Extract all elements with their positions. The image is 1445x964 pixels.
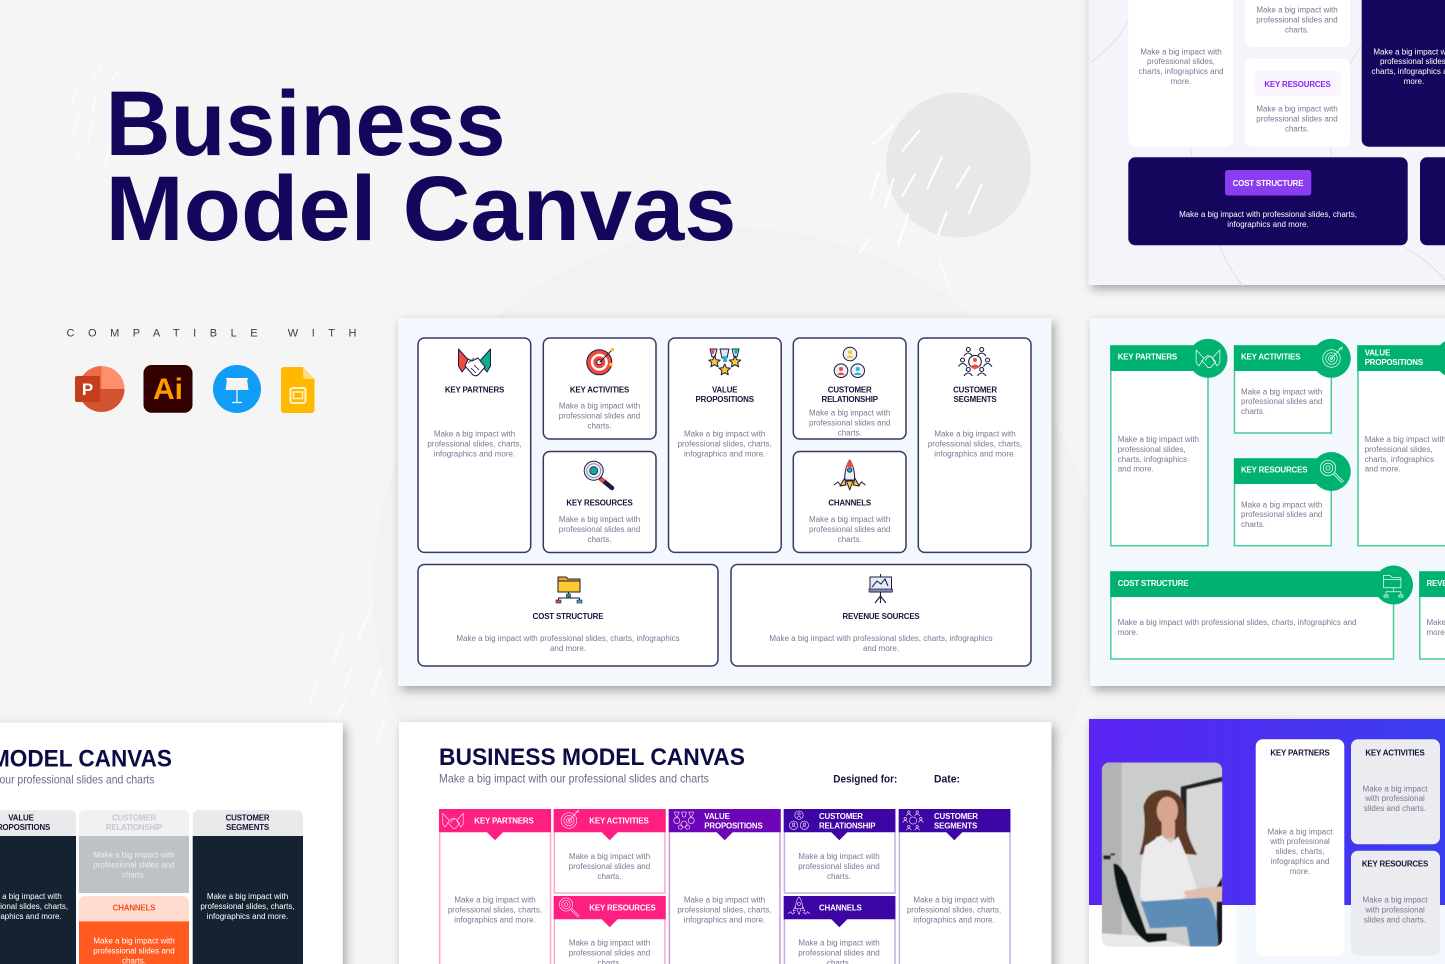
description: Make a big impact with — [93, 851, 175, 860]
description: professional slides and — [798, 949, 880, 958]
description: professional slides and — [569, 949, 650, 958]
subheading: our professional slides and charts — [0, 772, 154, 786]
description: charts. — [597, 872, 622, 881]
description: more. — [1404, 77, 1424, 86]
description: infographics and more. — [454, 916, 536, 924]
card: key partners — [1110, 339, 1228, 546]
label: KEY RESOURCES — [1362, 860, 1428, 869]
heading: BUSINESS MODEL CANVAS — [439, 744, 745, 771]
description: Make a big impact with — [798, 939, 880, 948]
panel: photo canvas (bottom right) — [1089, 719, 1445, 964]
description: charts. — [1241, 520, 1265, 529]
software icons — [75, 365, 314, 413]
description: Make a big impact with — [93, 937, 175, 946]
icon: target — [561, 810, 579, 828]
description: professional slides, charts, — [928, 440, 1022, 449]
card: revenue sources — [1419, 571, 1445, 659]
card: customer segments — [193, 810, 303, 964]
card: key partners body — [1128, 0, 1233, 147]
panel: outlined icon canvas — [398, 318, 1052, 686]
description: Make a big impact with — [1118, 435, 1199, 444]
icon: rocket — [788, 897, 810, 915]
description: professional slides and — [809, 419, 890, 428]
description: professional slides, — [1118, 445, 1186, 454]
icon: Google Slides — [281, 367, 314, 413]
description: Make a big impact with professional slides, charts, — [1179, 210, 1357, 219]
icon: target — [587, 348, 614, 375]
icon: PowerPoint: P — [82, 380, 93, 399]
label: PROPOSITIONS — [704, 822, 763, 831]
description: professional slides and — [559, 525, 640, 534]
description: Make a big impact with — [798, 852, 880, 861]
label: KEY PARTNERS — [445, 385, 504, 394]
description: Make a big impact with — [1241, 500, 1322, 509]
description: professional slides and — [569, 862, 650, 871]
description: infographics and more. — [934, 450, 1016, 458]
description: Make a big impact — [1363, 896, 1428, 905]
card: customer segments — [918, 338, 1031, 552]
title: Business — [106, 73, 506, 175]
card: channels — [793, 452, 906, 552]
description: professional slides, charts, — [678, 440, 772, 449]
card: key resources — [543, 452, 656, 552]
description: charts. — [838, 428, 862, 438]
card: customer relationship — [793, 338, 906, 439]
card: key partners — [1256, 739, 1344, 956]
description: Make a big impact with professional slides, charts, infographics and — [1118, 618, 1356, 627]
label: RELATIONSHIP — [106, 823, 162, 832]
icon: Keynote — [213, 365, 261, 413]
description: Make a big impact with — [934, 430, 1016, 439]
description: professional slides and — [559, 412, 640, 421]
compatible with label: COMPATIBLE WITH — [66, 328, 357, 340]
card: key activities — [1351, 739, 1440, 844]
description: Make a big impact with professional slides, charts, infographics — [456, 634, 680, 643]
label: RELATIONSHIP — [822, 395, 878, 404]
icon: magnifier — [584, 461, 612, 488]
card: revenue sources edge — [1420, 157, 1445, 245]
photo of seated woman — [1102, 762, 1223, 947]
description: Make a big impact with — [569, 852, 650, 861]
label: PROPOSITIONS — [696, 395, 754, 404]
card: cost structure — [418, 564, 718, 666]
description: professional slides and — [1241, 510, 1322, 519]
description: slides, charts, — [1276, 847, 1324, 856]
label: KEY ACTIVITIES — [1365, 749, 1425, 758]
description: professional slides and — [809, 525, 890, 534]
card: key resources — [1351, 851, 1440, 956]
card: key partners — [439, 809, 551, 964]
description: Make a big impact with — [809, 515, 890, 524]
description: Make a big impact with professional slides, charts, infographics — [769, 634, 993, 643]
card: value propositions — [668, 338, 781, 552]
description: Make a big impact with — [684, 430, 765, 439]
card: customer relationship — [784, 809, 895, 893]
description: Make a big impact with — [569, 939, 650, 948]
description: professional slides and — [1256, 16, 1338, 25]
panel: navy and orange canvas (bottom left) — [0, 723, 343, 964]
description: professional slides and — [1256, 115, 1338, 124]
description: infographics and more. — [207, 912, 288, 921]
card: key activities body — [1245, 0, 1350, 47]
label pill: COST STRUCTURE — [1233, 179, 1303, 188]
description: professional slides and — [93, 861, 175, 870]
icon: Illustrator: Ai — [153, 373, 183, 406]
label: KEY RESOURCES — [1241, 466, 1307, 474]
card: channels — [784, 896, 895, 964]
label: VALUE — [704, 812, 730, 821]
card: key resources — [554, 896, 666, 964]
description: infographics and more. — [1227, 220, 1309, 229]
card: value propositions — [669, 809, 781, 964]
description: Make a big impact with — [434, 430, 515, 439]
card: value propositions — [0, 810, 76, 964]
card: customer relationship — [79, 810, 189, 893]
label: KEY ACTIVITIES — [589, 816, 649, 825]
card: cost structure — [1110, 566, 1413, 659]
label: SEGMENTS — [226, 823, 269, 832]
card: key resources — [1245, 59, 1350, 147]
label: RELATIONSHIP — [819, 822, 875, 831]
description: professional slides, — [1147, 57, 1215, 66]
icon: chart easel — [869, 574, 892, 603]
description: more. — [1171, 77, 1191, 86]
label: REVENUE SOURCES — [842, 612, 920, 621]
icon: people — [789, 811, 809, 830]
description: charts, infographics — [1118, 455, 1187, 464]
label: CHANNELS — [819, 903, 862, 912]
label: KEY PARTNERS — [1270, 749, 1330, 758]
icon: connected people — [834, 347, 864, 378]
description: infographics and more. — [434, 450, 515, 458]
label: KEY PARTNERS — [1118, 352, 1177, 362]
description: infographics and more. — [684, 450, 765, 458]
designed for label: Designed for: — [833, 774, 897, 786]
description: professional slides and — [798, 862, 880, 871]
icon: rocket — [834, 460, 866, 490]
icon: handshake — [443, 813, 463, 829]
icon: magnifier — [1320, 460, 1343, 483]
label: CUSTOMER — [828, 385, 872, 394]
label: KEY RESOURCES — [566, 499, 633, 508]
card: key activities — [543, 338, 656, 439]
icon: Illustrator — [144, 365, 192, 413]
label: KEY PARTNERS — [474, 816, 534, 825]
label: KEY RESOURCES — [589, 903, 656, 912]
description: slides and charts. — [1364, 804, 1426, 813]
description: professional slides, — [1365, 445, 1433, 454]
description: Make a big impact with — [1140, 47, 1222, 56]
card: revenue sources — [731, 564, 1031, 666]
panel: pink and purple canvas (bottom centre) — [399, 722, 1052, 964]
icon: PowerPoint — [75, 366, 124, 412]
description: with professional — [1364, 906, 1425, 915]
description: Make a big impact — [1363, 784, 1428, 793]
description: more. — [1290, 867, 1310, 876]
description: charts. — [1285, 124, 1309, 134]
description: charts. — [122, 870, 146, 880]
label: KEY ACTIVITIES — [570, 385, 629, 394]
description: charts. — [587, 535, 612, 544]
description: charts. — [827, 872, 851, 881]
panel: green canvas (middle right) — [1090, 318, 1445, 686]
description: Make a big impact with — [809, 409, 890, 418]
description: charts. — [1285, 26, 1309, 34]
description: more. — [1118, 628, 1138, 637]
description: slides and charts. — [1364, 916, 1426, 924]
icon: medals — [674, 812, 694, 829]
label pill: KEY RESOURCES — [1264, 80, 1331, 89]
icon: target — [1323, 347, 1342, 367]
description: charts. — [838, 535, 862, 544]
card: key resources — [1234, 452, 1351, 546]
label: COST STRUCTURE — [533, 612, 603, 621]
label: VALUE — [8, 813, 34, 822]
card: channels — [79, 896, 189, 964]
label: SEGMENTS — [934, 822, 977, 831]
description: and more. — [863, 644, 899, 653]
label: CUSTOMER — [953, 385, 997, 394]
description: infographics and more. — [684, 916, 765, 924]
description: with professional — [1364, 794, 1425, 803]
icon: magnifier — [559, 898, 579, 917]
description: and more. — [1365, 465, 1401, 474]
icon: handshake — [1196, 350, 1220, 368]
icon: handshake — [458, 349, 490, 376]
description: Make a big impact with — [684, 896, 765, 905]
label: PROPOSITIONS — [1365, 358, 1423, 367]
label: CUSTOMER — [226, 813, 270, 822]
label: COST STRUCTURE — [1118, 579, 1188, 588]
card: key activities — [1234, 339, 1351, 433]
label: VALUE — [1365, 348, 1390, 357]
description: Make a big impact — [1268, 827, 1333, 836]
label: CHANNELS — [113, 904, 155, 913]
description: charts. — [587, 422, 612, 430]
description: infographics and — [1271, 857, 1329, 866]
description: Make a big impact with — [559, 515, 640, 524]
description: and more. — [550, 644, 586, 653]
description: Make a big impact with — [1241, 387, 1322, 396]
description: with professional — [1269, 837, 1330, 846]
description: Make a big impact with — [1256, 6, 1338, 15]
label: SEGMENTS — [953, 395, 997, 404]
icon: people network — [903, 811, 923, 830]
label: VALUE — [712, 385, 737, 394]
description: Make a big impact with — [559, 402, 640, 411]
card: key activities — [554, 809, 666, 893]
label pill — [1225, 170, 1311, 196]
description: professional slides, charts, — [427, 440, 522, 449]
panel: purple and navy canvas (top right) — [1088, 0, 1445, 286]
subheading: Make a big impact with our professional slides and charts — [439, 772, 709, 786]
icon: medals — [709, 349, 741, 375]
icon: people network — [958, 348, 992, 376]
description: and more. — [1118, 465, 1154, 474]
description: Make a big impact with — [207, 892, 288, 901]
icon: folder — [1383, 576, 1403, 597]
description: Make a big impact with — [913, 896, 995, 905]
description: professional slides, charts, — [200, 902, 295, 911]
title — [106, 73, 736, 260]
description: professional slides, charts, — [677, 906, 772, 915]
card: key partners — [418, 338, 531, 552]
label: CHANNELS — [828, 499, 871, 508]
description: professional slides, charts, — [907, 906, 1001, 915]
description: professional slides, charts, — [448, 906, 542, 915]
card: value propositions body — [1362, 0, 1445, 147]
description: professional slides and — [1241, 397, 1322, 406]
label: KEY ACTIVITIES — [1241, 352, 1300, 362]
description: infographics and more. — [913, 916, 995, 924]
label: CUSTOMER — [112, 813, 156, 822]
description: charts, infographics and — [1139, 67, 1223, 76]
icon: folder network — [556, 577, 582, 603]
description: professional slides and — [93, 947, 175, 956]
card: cost structure — [1128, 157, 1408, 245]
label: CUSTOMER — [819, 812, 863, 821]
date label: Date: — [934, 774, 960, 786]
description: charts. — [1241, 407, 1265, 416]
card: customer segments — [899, 809, 1010, 964]
description: Make a big impact with — [1365, 435, 1445, 444]
label: CUSTOMER — [934, 812, 978, 821]
card: value propositions — [1357, 339, 1445, 546]
description: charts, infographics — [1365, 455, 1434, 464]
description: Make a big impact with — [454, 896, 536, 905]
description: Make a big impact with — [1256, 105, 1338, 114]
title: Model Canvas — [106, 158, 736, 260]
